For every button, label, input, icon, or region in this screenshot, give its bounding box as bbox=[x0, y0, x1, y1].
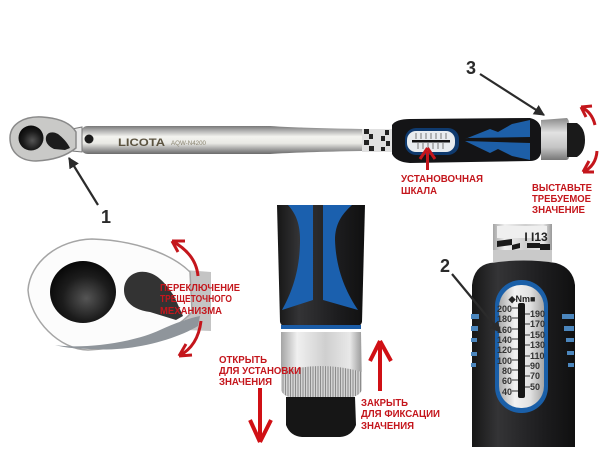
arrow and number 1: 1 bbox=[101, 207, 111, 227]
end knob bbox=[567, 123, 585, 157]
Nm unit: ◆Nm■ bbox=[508, 294, 535, 304]
scale numbers left: 140 bbox=[497, 335, 512, 345]
arrow and number 3: 3 bbox=[466, 58, 476, 78]
label: close to lock value: ЗНАЧЕНИЯ bbox=[361, 420, 414, 432]
label: set required value: ВЫСТАВЬТЕ bbox=[532, 182, 592, 194]
reversing lever bbox=[124, 272, 183, 320]
scale drum: I I13 bbox=[524, 230, 548, 244]
setting scale window bbox=[405, 128, 459, 155]
scale numbers right: 130 bbox=[530, 340, 545, 350]
full torque wrench bbox=[10, 117, 585, 163]
scale numbers left: 160 bbox=[497, 325, 512, 335]
adjustment collar bbox=[541, 118, 569, 160]
model label: AQW-N4200 bbox=[171, 141, 207, 147]
scale drum bbox=[493, 224, 552, 262]
blue grip pattern bbox=[282, 205, 313, 310]
lock knob bbox=[286, 397, 356, 437]
checkered scale band bbox=[362, 129, 394, 152]
blue handle grip mark bbox=[465, 120, 530, 160]
scale numbers right: 70 bbox=[530, 371, 540, 381]
brand label: LICOTA bbox=[118, 137, 165, 149]
arrow and number 2 bbox=[440, 256, 500, 332]
arrow and number 2: 2 bbox=[440, 256, 450, 276]
scale numbers right: 110 bbox=[530, 351, 545, 361]
label: setting scale: УСТАНОВОЧНАЯ bbox=[401, 173, 483, 185]
scale close-up bbox=[471, 224, 575, 447]
scale numbers left: 40 bbox=[502, 387, 512, 397]
scale numbers left: 180 bbox=[497, 314, 512, 324]
label: open to set value: ДЛЯ УСТАНОВКИ bbox=[219, 365, 301, 377]
red arrow: open bbox=[250, 388, 271, 442]
label: set required value: ЗНАЧЕНИЕ bbox=[532, 204, 585, 216]
black grip bbox=[277, 205, 365, 329]
scale numbers right: 50 bbox=[530, 382, 540, 392]
label: set required value: ТРЕБУЕМОЕ bbox=[532, 193, 591, 205]
black handle bbox=[392, 118, 541, 163]
red arrows: ratchet switch bbox=[172, 241, 201, 356]
label: ratchet switching: ПЕРЕКЛЮЧЕНИЕ bbox=[160, 282, 240, 294]
handle and collar close-up bbox=[277, 205, 365, 437]
label: close to lock value: ДЛЯ ФИКСАЦИИ bbox=[361, 408, 440, 420]
ratchet head close-up bbox=[28, 239, 211, 350]
scale numbers left: 100 bbox=[497, 356, 512, 366]
large hole bbox=[50, 261, 116, 323]
arrow and number 3 bbox=[466, 58, 544, 115]
scale numbers right: 90 bbox=[530, 361, 540, 371]
scale numbers left: 60 bbox=[502, 376, 512, 386]
scale numbers right: 170 bbox=[530, 319, 545, 329]
scale numbers left: 80 bbox=[502, 366, 512, 376]
shaft bolt bbox=[84, 134, 94, 144]
scale window bbox=[495, 280, 548, 413]
metal collar bbox=[281, 332, 362, 397]
scale numbers right: 190 bbox=[530, 309, 545, 319]
scale numbers left: 200 bbox=[497, 304, 512, 314]
arrow and number 1 bbox=[69, 158, 111, 227]
label: open to set value: ЗНАЧЕНИЯ bbox=[219, 376, 272, 388]
label: ratchet switching: МЕХАНИЗМА bbox=[160, 305, 222, 317]
label: ratchet switching: ТРЕЩЕТОЧНОГО bbox=[160, 293, 232, 305]
handle body bbox=[472, 260, 575, 447]
label: open to set value: ОТКРЫТЬ bbox=[219, 354, 267, 366]
red arrow: close bbox=[370, 341, 391, 391]
wrench shaft bbox=[82, 126, 362, 154]
knurled band bbox=[281, 366, 362, 397]
red arrows: rotate knob bbox=[581, 106, 597, 172]
label: setting scale: ШКАЛА bbox=[401, 185, 437, 197]
red arrow: setting scale bbox=[420, 148, 435, 170]
indicator strip bbox=[518, 303, 525, 398]
scale numbers right: 150 bbox=[530, 330, 545, 340]
scale numbers left: 120 bbox=[497, 345, 512, 355]
wrench head bbox=[10, 117, 82, 161]
label: close to lock value: ЗАКРЫТЬ bbox=[361, 397, 408, 409]
side blue marks bbox=[471, 314, 574, 367]
